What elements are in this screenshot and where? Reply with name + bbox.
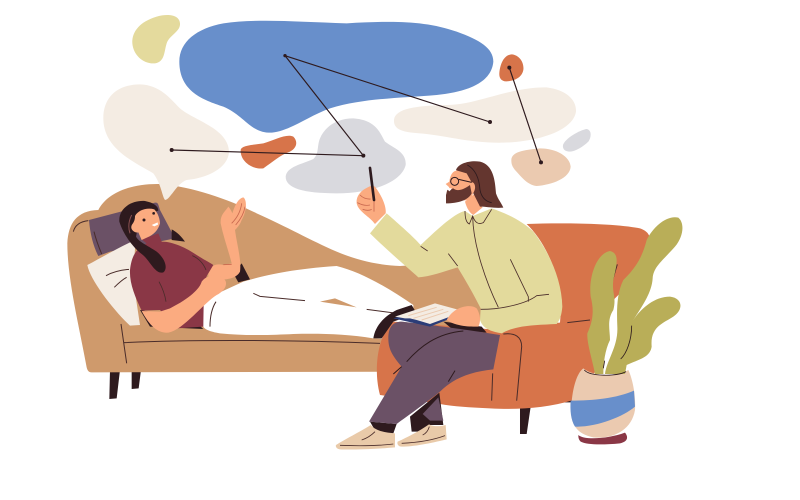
blob: cream right (394, 87, 576, 143)
white trousers (203, 266, 413, 340)
paper text lines (408, 307, 448, 320)
raised hand finger lines (357, 195, 374, 212)
couch body (67, 184, 493, 372)
pen (370, 168, 374, 200)
shoe lines (340, 427, 445, 446)
neck (465, 193, 483, 215)
armchair (377, 223, 651, 409)
blob: peach (511, 148, 571, 186)
chair legs (520, 388, 573, 434)
dark under lap (373, 305, 487, 338)
couch legs (109, 370, 141, 399)
couch seams (73, 221, 380, 363)
patient hair strand (129, 215, 132, 233)
pot base (578, 433, 627, 444)
couch gap between legs (320, 298, 357, 307)
shirt (370, 208, 562, 333)
shoes (336, 424, 447, 450)
far leg (423, 397, 443, 421)
hand on notebook (447, 306, 480, 327)
pot blue band (570, 391, 635, 427)
blob: small orange (499, 54, 523, 81)
blob: cream speech bubble (103, 84, 229, 200)
raised hand finger lines (223, 203, 245, 265)
resting arm and hand (142, 275, 226, 333)
face (446, 171, 475, 202)
blob: gray (286, 118, 406, 193)
shirt (130, 233, 213, 328)
purple pillow (89, 203, 175, 256)
connecting lines with dots (170, 54, 543, 164)
paper (395, 303, 464, 324)
shirt lines (421, 209, 549, 309)
plant leaves (587, 217, 682, 374)
hair strand (467, 165, 492, 203)
shirt and hand lines (159, 256, 206, 302)
blob: small gray (563, 129, 591, 152)
patient facial features (142, 212, 158, 226)
far foot and dark sock (370, 393, 443, 433)
hair (456, 161, 503, 208)
clipboard (393, 307, 466, 327)
plant and pot lines (584, 326, 632, 375)
mouth (446, 187, 452, 191)
thought blobs and connecting lines (103, 15, 591, 200)
trouser lines (393, 331, 463, 382)
pillow creases (94, 232, 129, 287)
raised hand (357, 186, 386, 224)
blob: orange middle (241, 136, 296, 169)
blob: large blue (179, 21, 493, 133)
dark shadow behind patient (140, 229, 250, 329)
raised arm and hand (208, 197, 246, 280)
couch with patient (67, 184, 493, 399)
trouser creases (210, 293, 410, 327)
patient hair (119, 201, 166, 273)
pot (571, 368, 635, 438)
therapist with armchair (336, 161, 682, 450)
blob: yellow (132, 15, 180, 63)
patient face (131, 209, 160, 240)
white pillow (87, 241, 140, 326)
near leg trousers (369, 322, 500, 424)
chair seams (492, 264, 617, 401)
glasses (451, 177, 472, 185)
beard (446, 185, 472, 203)
